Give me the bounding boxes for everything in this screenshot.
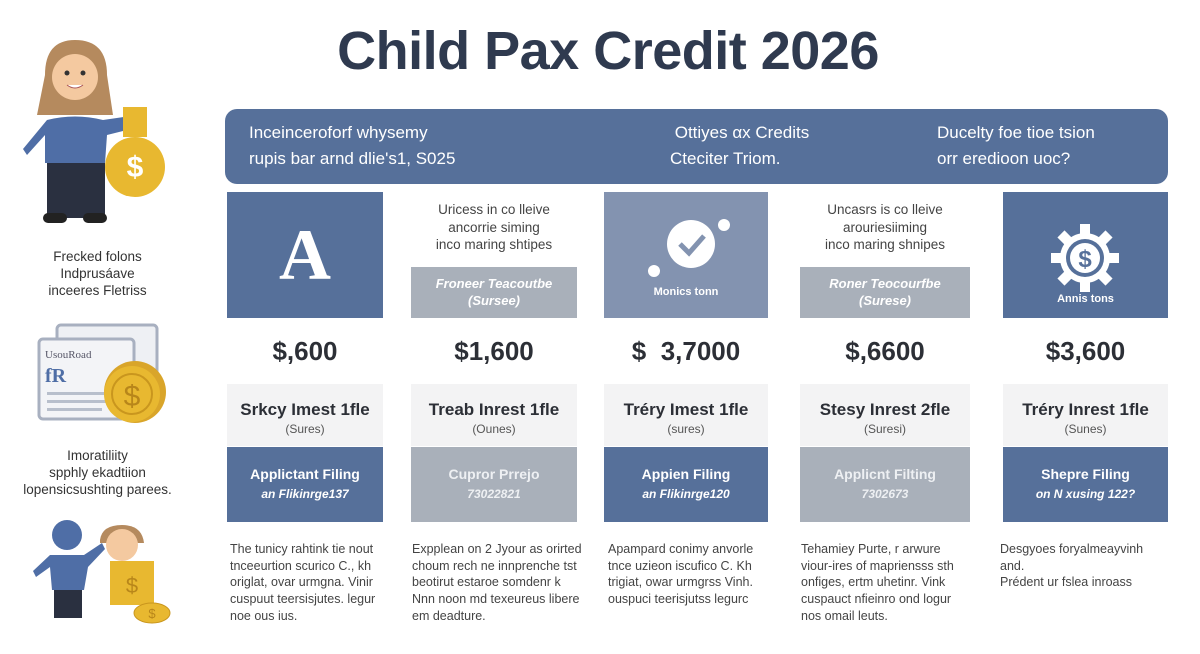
filing box [1003, 447, 1168, 522]
label [227, 384, 383, 446]
filing box [411, 447, 577, 522]
filing box: an Flikinrge120 [642, 487, 730, 501]
amount: $3,600 [1046, 336, 1125, 366]
amount: $,600 [272, 336, 338, 366]
amount: $,6600 [845, 336, 925, 366]
left illustration: woman with money bag [23, 40, 165, 223]
label: Tréry Inrest 1fle [1022, 400, 1149, 419]
left text 2: Imoratiliity [67, 448, 128, 463]
filing box: an Flikinrge137 [261, 487, 349, 501]
banner text 3: Ducelty foe tioe tsion [937, 123, 1095, 142]
description: The tunicy rahtink tie nout tnceeurtion scurico C., kh origlat, ovar urmgna. Vinir cuspuut teersisjutes. legur noe ous ius. [230, 542, 375, 623]
filing box: Cupror Prrejo [448, 466, 540, 482]
description: Desgyoes foryalmeayvinh and. [1000, 542, 1143, 573]
label [411, 384, 577, 446]
filing box: Applictant Filing [250, 466, 360, 482]
left text 1: Indprusáave [60, 266, 135, 281]
title: Child Pax Credit 2026 [337, 21, 879, 81]
label: Treab Inrest 1fle [429, 400, 559, 419]
description: Apampard conimy anvorle tnce uzieon iscufico C. Kh trigiat, owar urmgrss Vinh. ouspuci teerisjutss legurc [608, 542, 753, 606]
column 2 [411, 202, 582, 623]
label: (Suresi) [864, 422, 906, 436]
banner text 1: rupis bar arnd dlie's1, S025 [249, 149, 455, 168]
filing box [604, 447, 768, 522]
left text 1 [48, 249, 147, 298]
banner text 2: Ottiyes αx Credits [675, 123, 809, 142]
icon box: gear with dollar: $ [1078, 246, 1092, 273]
intro text: inco maring shnipes [825, 237, 945, 252]
column 4 [800, 202, 970, 623]
column 3 [604, 192, 768, 606]
banner [225, 109, 1168, 184]
gray box: (Sursee) [468, 293, 520, 308]
icon box: check circle: Monics tonn [654, 286, 718, 298]
filing box: 7302673 [862, 487, 908, 501]
gray box [800, 267, 970, 318]
amount: $ 3,7000 [632, 336, 740, 366]
icon box: gear with dollar [1003, 192, 1168, 318]
label: (sures) [667, 422, 705, 436]
left text 2: spphly ekadtiion [49, 465, 146, 480]
description: Tehamiey Purte, r arwure viour-ires of mapriensss sth onfiges, ertm uhetinr. Vink cuspauct nfieinro ond logur nos omail leuts. [801, 542, 954, 623]
label: (Ounes) [472, 422, 516, 436]
label: (Sunes) [1064, 422, 1107, 436]
banner text 1 [249, 123, 455, 168]
gray box: Froneer Teacoutbe [436, 276, 552, 291]
banner text 2 [670, 123, 809, 168]
left illustration: woman with money bag: $ [127, 151, 144, 184]
banner text 3: orr eredioon uoc? [937, 149, 1070, 168]
icon box: letter A [227, 192, 383, 318]
left illustration: two people with coins: $ [148, 606, 156, 621]
label: (Sures) [285, 422, 325, 436]
intro text: ancorrie siming [448, 220, 540, 234]
label [604, 384, 768, 446]
left text 2: lopensicsushting pareеs. [23, 482, 172, 497]
left illustration: documents with coins: UsouRoad [45, 349, 92, 361]
banner text 2: Cteciter Triom. [670, 149, 781, 168]
intro text: Uricess in co lleive [438, 202, 550, 217]
description [1000, 542, 1143, 589]
filing box: 73022821 [467, 487, 521, 501]
icon box: gear with dollar: Annis tons [1057, 293, 1114, 305]
left text 2 [23, 448, 172, 497]
filing box: Appien Filing [642, 466, 730, 482]
gray box: (Surese) [859, 293, 911, 308]
left illustration: documents with coins [38, 324, 166, 423]
label [1003, 384, 1168, 446]
filing box [227, 447, 383, 522]
label: Stesy Inrest 2fle [820, 400, 950, 419]
left illustration: documents with coins: fR [45, 365, 67, 387]
amount: $1,600 [454, 336, 534, 366]
left illustration: two people with coins: $ [126, 573, 138, 598]
intro text: Uncasrs is co lleive arouriesiiming [827, 202, 943, 234]
intro text [825, 202, 945, 252]
filing box: Applicnt Filting [834, 466, 936, 482]
description: Prédent ur fslea inroass [1000, 575, 1132, 589]
icon box: check circle [604, 192, 768, 318]
column 1 [227, 192, 383, 623]
description: Expplean on 2 Jyour as orirted choum rech ne innprenche tst beotirut estaroe somdenr k Nnn noon md texeureus libere em deadture. [412, 542, 582, 623]
label [800, 384, 970, 446]
left text 1: Frecked folons [53, 249, 142, 264]
banner text 3 [937, 123, 1095, 168]
left text 1: inceeres Fletriss [48, 283, 147, 298]
gray box: Roner Teocourfbe [829, 276, 941, 291]
column 5 [1000, 192, 1168, 589]
intro text: inco maring shtipes [436, 237, 552, 252]
filing box: on N xusing 122? [1036, 487, 1135, 501]
gray box [411, 267, 577, 318]
left illustration: documents with coins: $ [124, 380, 141, 413]
filing box: Shepre Filing [1041, 466, 1130, 482]
left illustration: two people with coins [33, 520, 170, 624]
label: Srkcy Imest 1fle [240, 400, 370, 419]
banner text 1: Inceinceroforf whysemy [249, 123, 428, 142]
intro text [436, 202, 552, 252]
icon box: letter A: A [279, 215, 331, 295]
filing box [800, 447, 970, 522]
label: Tréry Imest 1fle [624, 400, 748, 419]
